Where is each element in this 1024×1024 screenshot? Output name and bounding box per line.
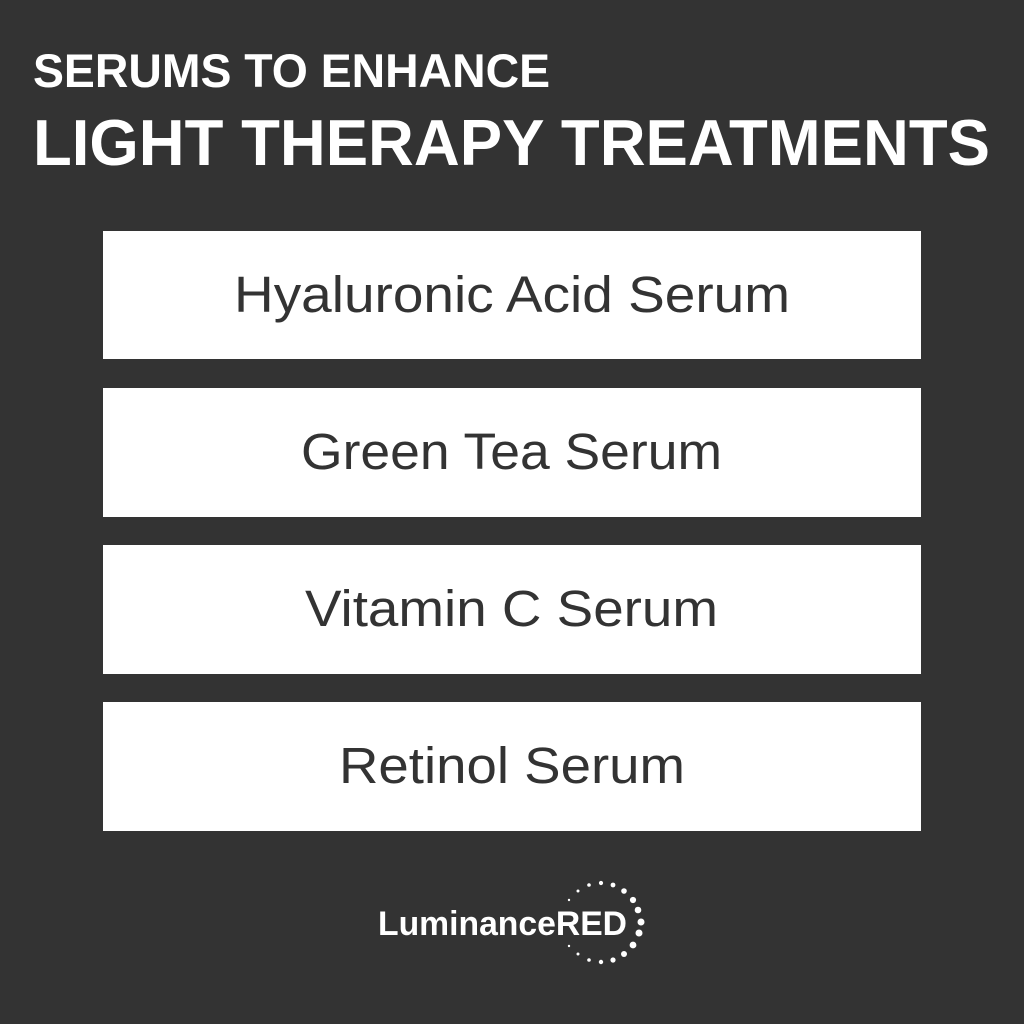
panel: Hyaluronic Acid Serum: Hyaluronic Acid Serum [234, 266, 790, 323]
title [33, 44, 990, 179]
title: LIGHT THERAPY TREATMENTS [33, 106, 990, 179]
panel: Vitamin C Serum [103, 545, 921, 674]
panel: Green Tea Serum [103, 388, 921, 517]
panel: Retinol Serum [103, 702, 921, 831]
panel: Retinol Serum: Retinol Serum [339, 737, 685, 794]
panel: Vitamin C Serum: Vitamin C Serum [305, 580, 718, 637]
logo: LuminanceRED: LuminanceRED [378, 905, 627, 943]
logo: LuminanceRED [378, 881, 644, 964]
panel: Hyaluronic Acid Serum [103, 231, 921, 359]
panel: Green Tea Serum: Green Tea Serum [301, 423, 722, 480]
title: SERUMS TO ENHANCE [33, 44, 550, 97]
